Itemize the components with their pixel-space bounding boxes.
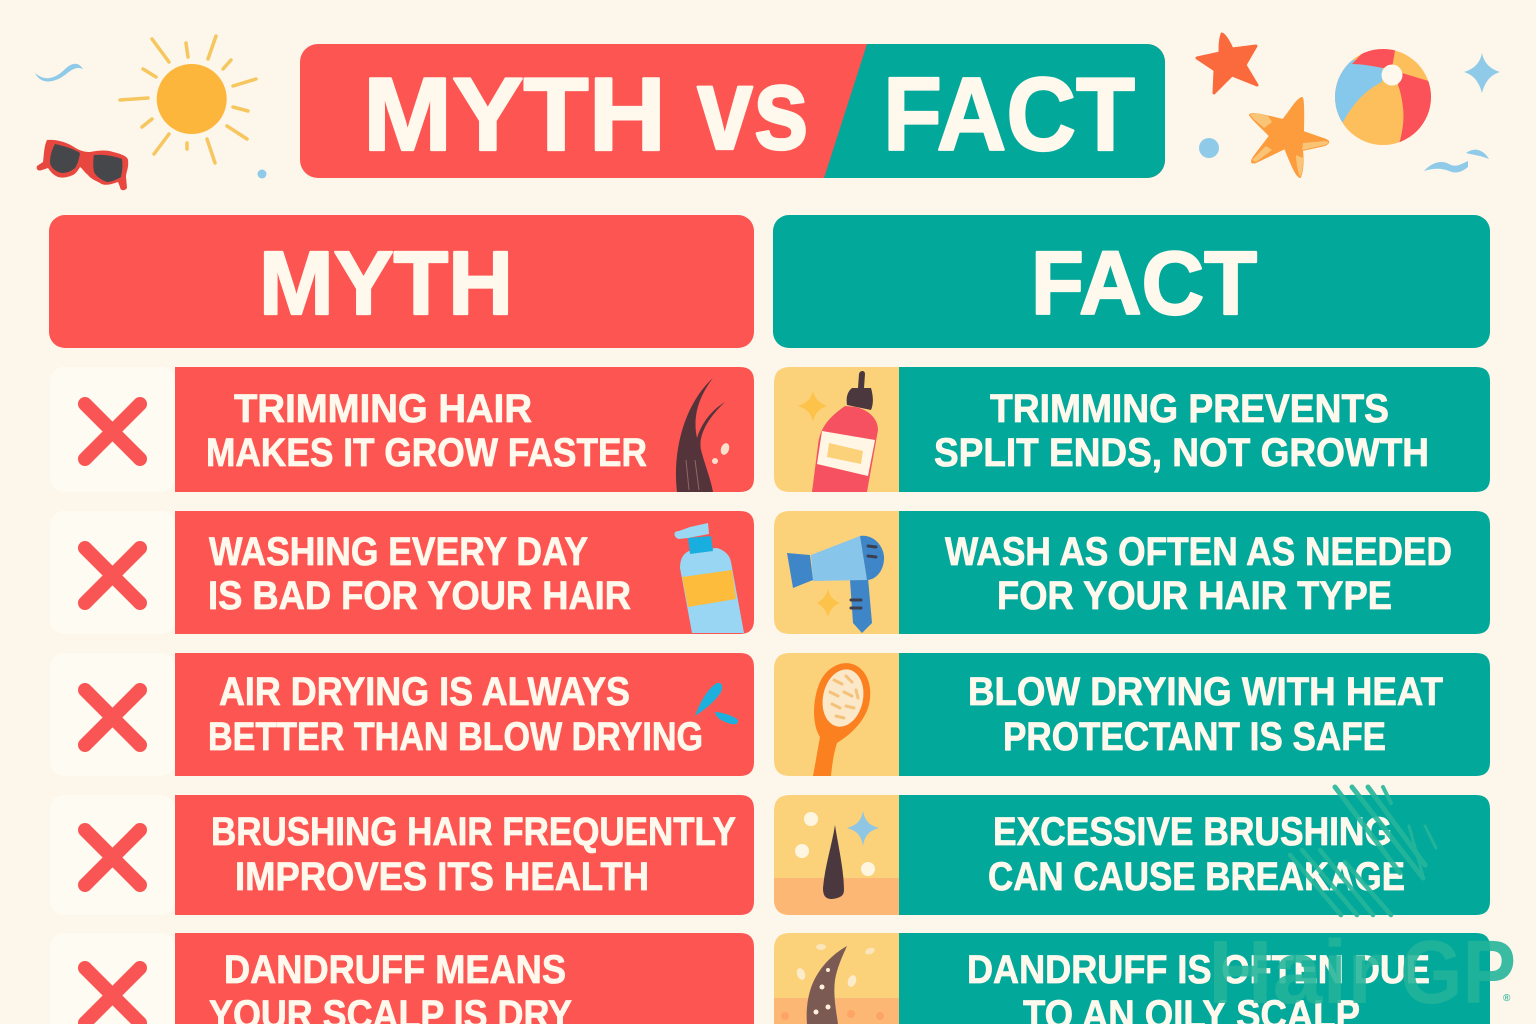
title text: myth vs	[363, 43, 809, 175]
watermark: HairGP logo: Hair	[1208, 923, 1382, 1023]
myth 3 text	[208, 670, 703, 759]
icon: x mark	[85, 404, 140, 459]
fact 4 text: CAN CAUSE BREAKAGE	[988, 855, 1405, 899]
title text: myth vs: vs	[697, 43, 809, 175]
icon: blue sparkle	[1464, 53, 1500, 93]
icon: hair dryer	[787, 536, 884, 633]
fact 3 text	[968, 670, 1443, 759]
fact 1 text: TRIMMING PREVENTS	[990, 387, 1389, 431]
icon: small dot	[258, 170, 266, 178]
panel: fact header	[773, 215, 1490, 348]
icon: x mark	[85, 548, 140, 603]
fact 4 text	[988, 810, 1405, 899]
fact row 5	[774, 933, 1490, 1024]
fact 1 text	[934, 387, 1429, 475]
icon: flaky hair on scalp	[774, 944, 899, 1024]
icon: sun	[120, 36, 256, 163]
myth row 5	[50, 933, 754, 1024]
title text: myth vs: MYTH	[363, 57, 666, 173]
myth 1 text: TRIMMING HAIR	[234, 387, 532, 431]
watermark: HairGP logo: GP	[1400, 923, 1516, 1023]
fact row 3	[774, 653, 1490, 776]
watermark: HairGP logo	[1208, 923, 1516, 1023]
heading: fact: FACT	[1031, 234, 1257, 334]
fact 3 text: BLOW DRYING WITH HEAT	[968, 670, 1443, 714]
myth 4 text: IMPROVES ITS HEALTH	[235, 855, 649, 899]
icon: shampoo bottle	[674, 523, 744, 633]
icon: orange-red starfish	[1197, 34, 1257, 93]
myth 4 text: BRUSHING HAIR FREQUENTLY	[211, 810, 736, 854]
panel: myth header	[49, 215, 754, 348]
fact 2 text: FOR YOUR HAIR TYPE	[997, 574, 1392, 618]
icon: orange starfish	[1250, 98, 1328, 177]
fact 3 text: PROTECTANT IS SAFE	[1003, 715, 1386, 759]
icon: hair follicle	[774, 811, 899, 915]
title text: fact: FACT	[883, 57, 1135, 173]
myth row 4	[50, 795, 754, 915]
fact 2 text: WASH AS OFTEN AS NEEDED	[945, 530, 1452, 574]
fact 5 text: DANDRUFF IS OFTEN DUE	[967, 948, 1430, 992]
watermark: scratch marks	[1290, 787, 1436, 915]
myth 1 text: MAKES IT GROW FASTER	[206, 431, 647, 475]
icon: water drops	[695, 683, 738, 724]
icon: conditioner bottle	[798, 371, 878, 492]
myth 3 text: BETTER THAN BLOW DRYING	[208, 715, 703, 759]
myth row 3	[50, 653, 754, 776]
icon: hair brush	[813, 663, 870, 776]
myth 3 text: AIR DRYING IS ALWAYS	[219, 670, 630, 714]
fact row 1	[774, 367, 1490, 492]
myth 1 text	[206, 387, 647, 475]
myth 4 text	[211, 810, 736, 899]
myth 5 text	[209, 948, 572, 1024]
fact 1 text: SPLIT ENDS, NOT GROWTH	[934, 431, 1429, 475]
myth 5 text: DANDRUFF MEANS	[224, 948, 566, 992]
myth row 2	[50, 511, 754, 634]
icon: x mark	[85, 830, 140, 885]
myth 2 text: WASHING EVERY DAY	[209, 530, 588, 574]
icon: x mark	[85, 968, 140, 1023]
fact 2 text	[945, 530, 1452, 618]
icon: hair strands	[676, 378, 731, 492]
myth 2 text: IS BAD FOR YOUR HAIR	[208, 574, 631, 618]
icon: right waves	[1424, 150, 1489, 172]
heading: myth: MYTH	[259, 234, 513, 334]
fact row 2	[774, 511, 1490, 634]
fact 4 text: EXCESSIVE BRUSHING	[993, 810, 1392, 854]
icon: sunglasses	[37, 140, 128, 190]
title banner	[300, 43, 1165, 178]
icon: blue dot right	[1199, 138, 1219, 158]
fact row 4	[774, 795, 1490, 915]
fact 5 text	[967, 948, 1430, 1024]
icon: left wave	[35, 64, 83, 82]
watermark: HairGP logo: ®	[1503, 993, 1511, 1004]
myth 2 text	[208, 530, 631, 618]
myth row 1	[50, 367, 754, 492]
icon: x mark	[85, 690, 140, 745]
icon: beach ball	[1335, 49, 1431, 145]
